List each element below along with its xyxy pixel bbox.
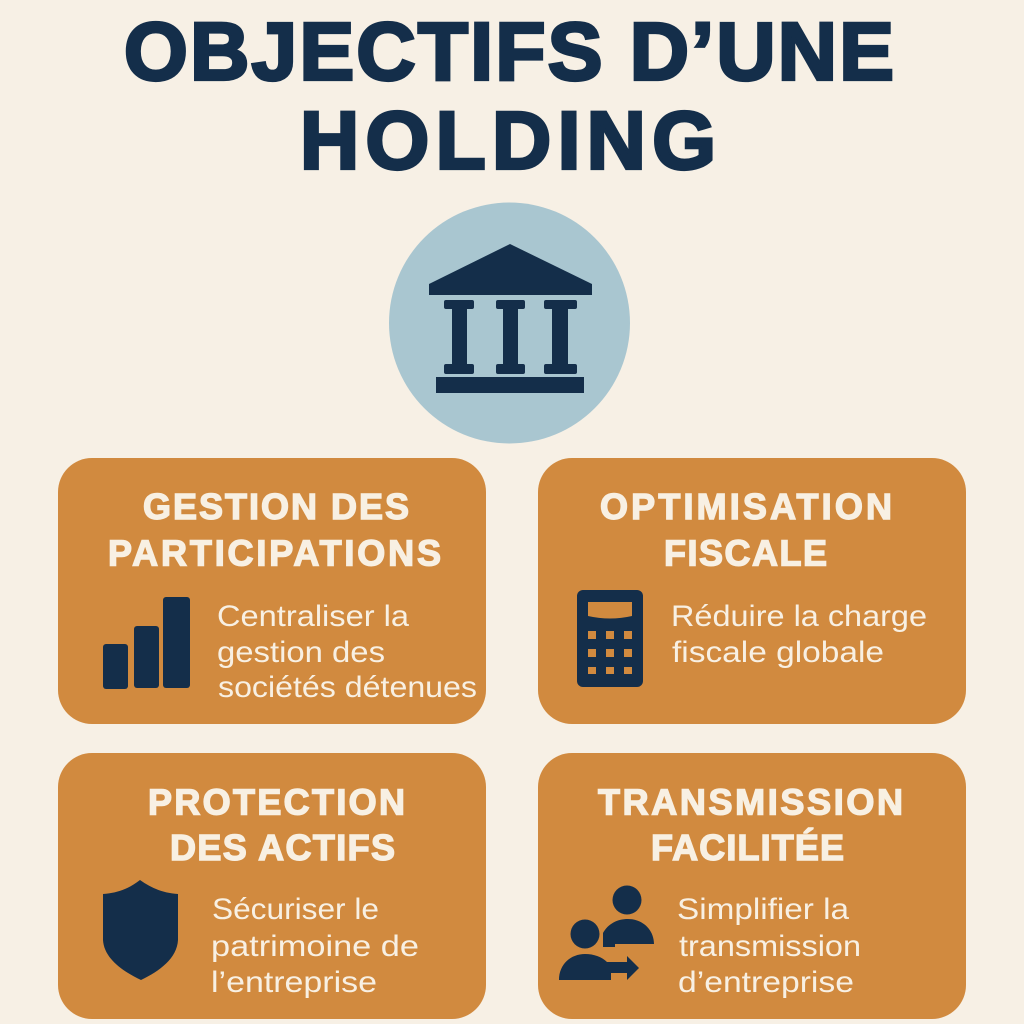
text: optimisation: fiscale globale	[672, 636, 884, 669]
text: gestion: Centraliser la	[217, 600, 409, 633]
heading: transmission: FACILITÉE	[651, 827, 844, 868]
text: gestion: gestion des	[217, 636, 385, 669]
text: transmission	[677, 893, 861, 999]
panel: transmission facilitée	[538, 753, 966, 1019]
icon: bar chart	[103, 597, 190, 689]
panel: gestion des participations	[58, 458, 486, 724]
heading: protection	[148, 782, 405, 868]
heading: gestion	[108, 486, 441, 574]
heading: gestion: PARTICIPATIONS	[108, 532, 441, 574]
icon: shield	[103, 880, 178, 980]
text: protection	[211, 893, 419, 999]
heading: optimisation: FISCALE	[664, 532, 827, 574]
title	[124, 6, 894, 186]
text: transmission: d’entreprise	[678, 966, 854, 999]
text: protection: l’entreprise	[211, 966, 377, 999]
text: protection: Sécuriser le	[212, 893, 379, 926]
heading: gestion: GESTION DES	[143, 486, 409, 527]
panel: protection des actifs	[58, 753, 486, 1019]
heading: optimisation	[600, 486, 892, 574]
text: transmission: Simplifier la	[677, 893, 849, 926]
heading: optimisation: OPTIMISATION	[600, 486, 892, 527]
icon: bank building in circle	[389, 202, 630, 444]
text: gestion: sociétés détenues	[218, 671, 477, 704]
text: protection: patrimoine de	[211, 930, 419, 963]
text: optimisation	[671, 600, 927, 669]
heading: transmission: TRANSMISSION	[598, 782, 903, 822]
heading: protection: DES ACTIFS	[170, 827, 395, 868]
title: HOLDING	[300, 96, 716, 186]
text: gestion	[217, 600, 477, 704]
title: OBJECTIFS D’UNE	[124, 6, 894, 98]
panel: optimisation fiscale	[538, 458, 966, 724]
icon: people with arrow	[559, 886, 654, 980]
text: optimisation: Réduire la charge	[671, 600, 927, 633]
heading: protection: PROTECTION	[148, 782, 405, 822]
icon: calculator	[577, 590, 643, 687]
heading: transmission	[598, 782, 903, 868]
text: transmission: transmission	[679, 930, 861, 963]
